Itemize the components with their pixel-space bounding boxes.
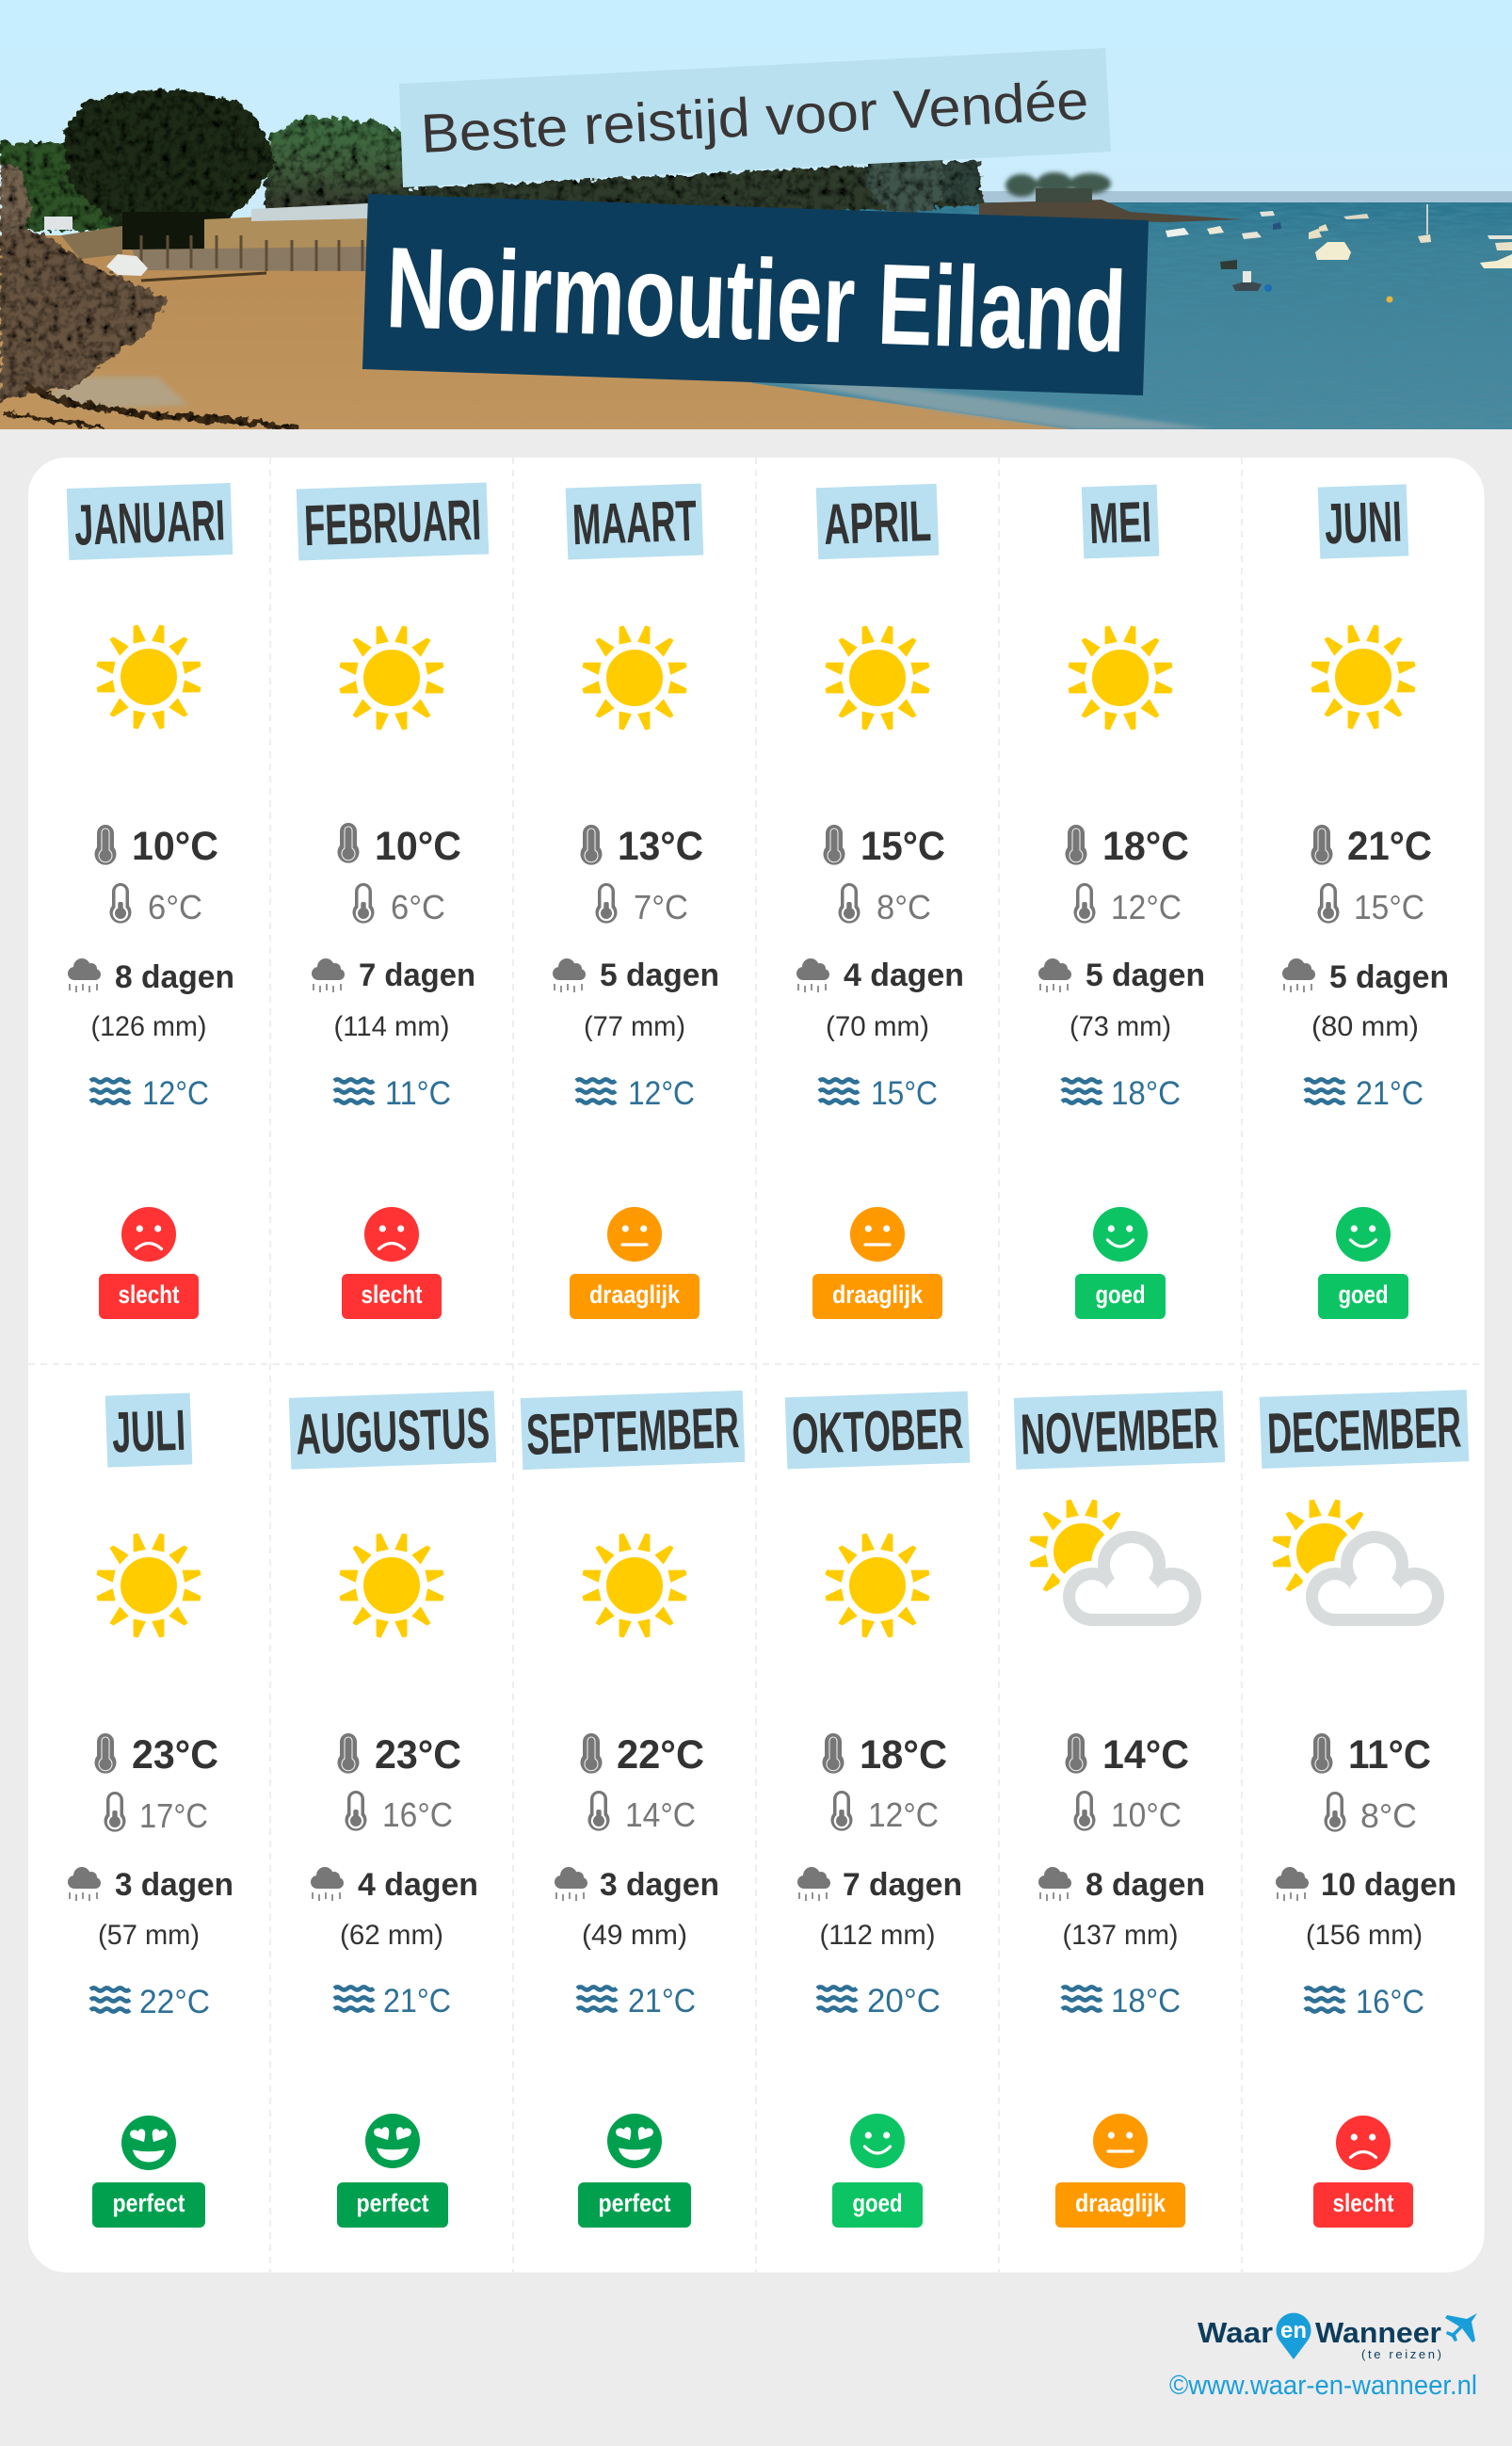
high temperature (823, 824, 945, 869)
title banner: Noirmoutier Eiland (384, 223, 1128, 377)
sea temperature: 20°C (867, 1983, 941, 2020)
low temperature (109, 883, 202, 926)
sea temperature: 18°C (1111, 1075, 1181, 1112)
rating: perfect: perfect (599, 2189, 671, 2217)
logo: Waar en Wanneer: (te reizen) (1361, 2347, 1441, 2361)
month label (521, 1391, 745, 1470)
month label (1014, 1391, 1225, 1470)
header photo: beach and sea (0, 0, 1512, 429)
month: mei (1038, 485, 1205, 1319)
month label (566, 484, 703, 559)
logo: Waar en Wanneer (1198, 2313, 1477, 2361)
high temperature (94, 824, 218, 869)
low temperature: 7°C (634, 888, 688, 926)
rain days: 4 dagen (358, 1867, 478, 1903)
sea temperature: 22°C (139, 1984, 210, 2020)
month label (67, 483, 233, 560)
rating: goed: goed (1339, 1280, 1388, 1309)
rating: goed: goed (853, 2189, 902, 2217)
rain days: 3 dagen (600, 1867, 719, 1903)
rating: slecht (342, 1207, 442, 1319)
icon: sun (583, 626, 686, 730)
month label: FEBRUARI (303, 488, 482, 557)
month label (816, 484, 939, 559)
low temperature: 6°C (148, 888, 202, 926)
rating: goed (832, 2114, 923, 2228)
icon: sun (97, 1534, 201, 1637)
month label: JUNI (1324, 490, 1403, 555)
high temperature: 10°C (132, 824, 218, 869)
sea temperature (334, 1983, 451, 2020)
rating: goed (1318, 1207, 1408, 1319)
rating: slecht (1313, 2116, 1413, 2228)
low temperature: 8°C (877, 888, 931, 926)
rating: slecht: slecht (119, 1280, 179, 1309)
rating: draaglijk: draaglijk (589, 1280, 681, 1309)
low temperature (595, 883, 688, 926)
high temperature (1311, 1732, 1431, 1778)
rating: slecht (99, 1207, 199, 1319)
sea temperature (1305, 1984, 1424, 2020)
month label: OKTOBER (791, 1396, 964, 1466)
high temperature: 13°C (618, 824, 703, 869)
icon: airplane (1445, 2313, 1477, 2342)
rainfall: (137 mm) (1062, 1920, 1179, 1951)
month label: SEPTEMBER (525, 1395, 740, 1467)
rain days: 3 dagen (115, 1867, 233, 1903)
rating: slecht: slecht (362, 1280, 422, 1309)
low temperature (352, 883, 445, 926)
month label (1082, 485, 1159, 558)
high temperature (337, 823, 461, 869)
sea temperature (577, 1983, 696, 2020)
sea temperature (334, 1075, 451, 1112)
high temperature (580, 1732, 704, 1778)
rain days (1282, 958, 1449, 995)
rating: goed (1075, 1207, 1166, 1319)
sea temperature: 11°C (385, 1075, 451, 1112)
high temperature: 18°C (860, 1732, 947, 1778)
rainfall: (62 mm) (340, 1920, 443, 1951)
sea temperature (1062, 1983, 1181, 2020)
sea temperature: 18°C (1111, 1983, 1181, 2020)
month label (1318, 484, 1408, 559)
high temperature: 11°C (1348, 1732, 1431, 1778)
low temperature (830, 1791, 939, 1834)
rating: perfect (92, 2116, 205, 2228)
icon: sun behind cloud (1030, 1500, 1207, 1633)
rainfall: (77 mm) (584, 1011, 685, 1042)
rain days: 4 dagen (844, 957, 964, 993)
month: oktober (785, 1392, 970, 2228)
month: maart (553, 484, 719, 1319)
rain days: 8 dagen (1086, 1867, 1205, 1903)
sea temperature: 21°C (383, 1983, 451, 2020)
sea temperature: 12°C (628, 1075, 695, 1112)
icon: sun (340, 626, 443, 730)
sea temperature: 16°C (1356, 1984, 1424, 2020)
icon: sun (340, 1534, 443, 1637)
rain days: 7 dagen (843, 1867, 962, 1903)
month: augustus (289, 1391, 496, 2228)
month: december (1260, 1390, 1469, 2228)
low temperature: 8°C (1360, 1796, 1417, 1835)
month label: APRIL (823, 489, 932, 556)
rain days (312, 957, 475, 993)
rain days: 5 dagen (1086, 957, 1205, 993)
month: juni (1282, 484, 1449, 1319)
high temperature (337, 1732, 461, 1778)
low temperature (104, 1792, 208, 1835)
month label (297, 482, 489, 561)
rating: perfect: perfect (113, 2189, 185, 2217)
sea temperature (90, 1984, 210, 2020)
rainfall: (70 mm) (826, 1011, 929, 1042)
logo: Waar en Wanneer: Waar (1198, 2316, 1273, 2349)
rainfall: (156 mm) (1306, 1920, 1423, 1951)
rainfall: (126 mm) (90, 1011, 207, 1042)
low temperature (345, 1791, 453, 1834)
rain days (68, 958, 234, 995)
panel: month grid card (28, 458, 1484, 2273)
rainfall: (112 mm) (819, 1920, 936, 1951)
high temperature: 23°C (132, 1732, 218, 1778)
month label (785, 1392, 970, 1469)
low temperature (838, 883, 931, 926)
rating: perfect (578, 2114, 691, 2228)
rain days: 10 dagen (1321, 1867, 1456, 1903)
sea temperature (817, 1983, 941, 2020)
high temperature (823, 1732, 947, 1778)
month: februari (297, 482, 489, 1319)
icon: sun (583, 1534, 686, 1637)
month: januari (67, 483, 234, 1319)
rating: perfect: perfect (356, 2189, 429, 2217)
rain days: 5 dagen (1329, 959, 1449, 995)
subtitle banner: Beste reistijd voor Vendée (419, 70, 1090, 165)
icon: sun (1311, 625, 1415, 729)
copyright url: ©www.waar-en-wanneer.nl (1169, 2371, 1477, 2401)
month label (289, 1391, 496, 1470)
high temperature: 14°C (1102, 1732, 1189, 1778)
rain days: 5 dagen (600, 957, 719, 993)
rainfall: (80 mm) (1311, 1011, 1419, 1042)
sea temperature: 21°C (1356, 1075, 1424, 1112)
high temperature: 22°C (617, 1732, 704, 1778)
sea temperature (819, 1075, 938, 1112)
rainfall: (73 mm) (1070, 1011, 1171, 1042)
icon: sun (1069, 626, 1172, 730)
rating: draaglijk: draaglijk (832, 1280, 924, 1309)
rating: draaglijk (570, 1207, 700, 1319)
month: september (521, 1391, 745, 2228)
high temperature (1311, 824, 1432, 869)
logo: Waar en Wanneer: Wanneer (1315, 2316, 1441, 2349)
month: november (1014, 1391, 1225, 2228)
icon: sun (97, 625, 201, 729)
high temperature (580, 824, 703, 869)
icon: map pin: en (1280, 2318, 1307, 2343)
high temperature (1066, 1732, 1189, 1778)
rating: slecht: slecht (1333, 2189, 1393, 2217)
month label: MAART (571, 489, 698, 556)
month: april (796, 484, 964, 1319)
high temperature: 15°C (861, 824, 945, 869)
month label: JULI (111, 1398, 186, 1464)
rainfall: (57 mm) (98, 1920, 200, 1951)
sea temperature: 21°C (628, 1983, 696, 2020)
month label: NOVEMBER (1020, 1395, 1219, 1467)
low temperature (587, 1791, 696, 1834)
rain days: 8 dagen (115, 959, 234, 995)
icon: sun (826, 626, 929, 730)
low temperature (1318, 883, 1424, 926)
rating: goed: goed (1096, 1280, 1145, 1309)
low temperature: 14°C (625, 1795, 696, 1834)
rating: perfect (337, 2114, 448, 2228)
sea temperature (1062, 1075, 1181, 1112)
icon: sun behind cloud (1273, 1500, 1450, 1633)
rating: draaglijk (812, 1207, 942, 1319)
high temperature (1066, 824, 1189, 869)
title banner (362, 194, 1149, 395)
low temperature (1073, 883, 1182, 926)
icon: sun (826, 1534, 929, 1637)
month label: MEI (1088, 490, 1152, 555)
rain days: 7 dagen (359, 957, 475, 993)
low temperature: 6°C (391, 888, 445, 926)
sea temperature: 12°C (142, 1075, 209, 1112)
high temperature (94, 1732, 218, 1778)
sea temperature (90, 1075, 209, 1112)
low temperature: 15°C (1354, 888, 1424, 926)
low temperature (1073, 1791, 1182, 1834)
rating: draaglijk: draaglijk (1075, 2189, 1166, 2217)
month label (105, 1392, 192, 1468)
sea temperature: 15°C (871, 1075, 938, 1112)
high temperature: 18°C (1102, 824, 1189, 869)
rainfall: (114 mm) (333, 1011, 450, 1042)
low temperature: 12°C (868, 1795, 939, 1834)
high temperature: 21°C (1347, 824, 1432, 869)
rating: draaglijk (1055, 2114, 1185, 2228)
low temperature: 16°C (382, 1795, 453, 1834)
high temperature: 10°C (375, 824, 461, 869)
low temperature (1324, 1792, 1417, 1835)
month label: JANUARI (73, 488, 226, 557)
sea temperature (576, 1075, 695, 1112)
low temperature: 10°C (1111, 1795, 1182, 1834)
month label: AUGUSTUS (295, 1395, 491, 1467)
rainfall: (49 mm) (582, 1920, 687, 1951)
icon: map pin (1277, 2313, 1311, 2359)
month: juli (68, 1392, 233, 2228)
low temperature: 17°C (139, 1796, 208, 1835)
high temperature: 23°C (375, 1732, 461, 1778)
subtitle banner (399, 48, 1111, 187)
low temperature: 12°C (1111, 888, 1182, 926)
sea temperature (1305, 1075, 1424, 1112)
